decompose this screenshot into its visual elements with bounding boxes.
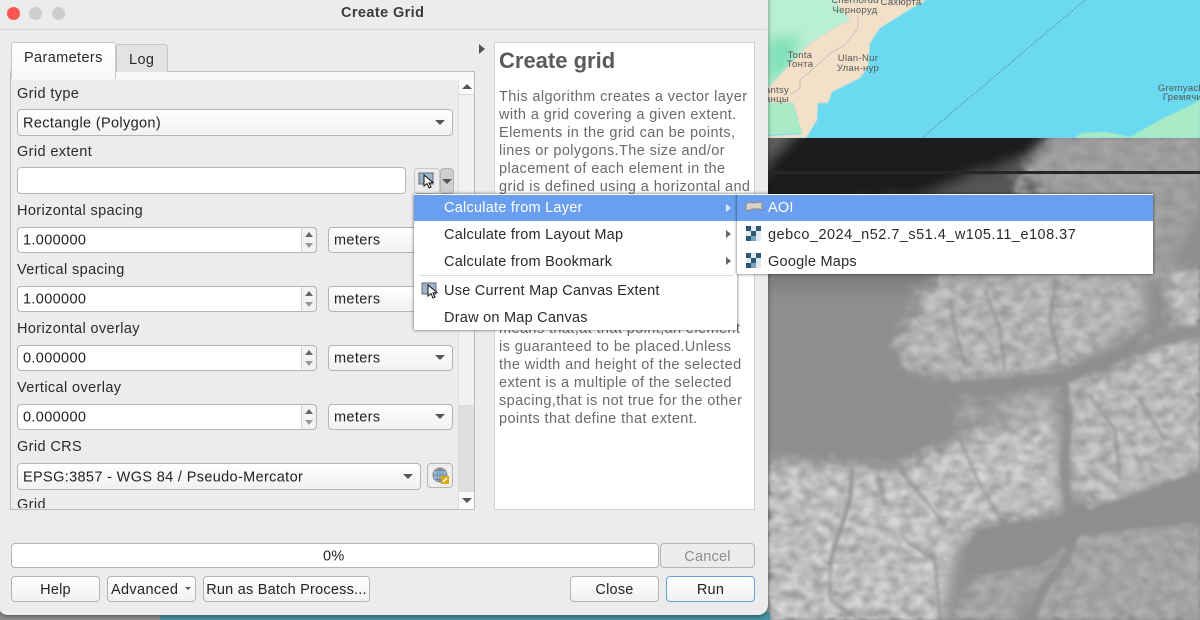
terrain: lower valley band bbox=[965, 470, 1200, 575]
combo: horizontal units bbox=[328, 227, 453, 253]
submenu item highlighted: AOI: AOI bbox=[768, 200, 794, 216]
menu item: Use Current Map Canvas Extent: Use Current Map Canvas Extent bbox=[444, 283, 660, 299]
extent dropdown menu bbox=[414, 194, 737, 330]
terrain: valley network bbox=[830, 280, 1200, 620]
combo: horizontal overlay units bbox=[328, 345, 453, 371]
help text block bbox=[499, 89, 750, 427]
button: Help bbox=[11, 576, 100, 602]
button: Run as Batch Process: Run as Batch Process... bbox=[206, 582, 367, 598]
button: Advanced bbox=[107, 576, 196, 602]
splitter arrow bbox=[479, 44, 485, 54]
window minimize button bbox=[29, 7, 42, 20]
terrain: dark basin at top bbox=[755, 120, 1060, 250]
menu item highlighted: Calculate from Layer bbox=[414, 195, 737, 221]
input: grid extent bbox=[17, 167, 406, 194]
label: Vertical overlay: Vertical overlay bbox=[17, 380, 121, 396]
submenu item: Google Maps: Google Maps bbox=[768, 254, 857, 270]
spin box: horizontal overlay bbox=[17, 345, 317, 371]
map: lake and shoreline: Ulan-Nur bbox=[838, 53, 878, 64]
combo: vertical overlay units: meters bbox=[334, 409, 380, 425]
button: Run as Batch Process bbox=[203, 576, 370, 602]
menu item: Calculate from Layout Map: Calculate from Layout Map bbox=[444, 227, 623, 243]
help text block: placement of each element in the bbox=[499, 161, 725, 177]
tab: Parameters bbox=[11, 42, 116, 79]
help text block: extent is a multiple of the selected bbox=[499, 375, 732, 391]
map: lake and shoreline: Тонта bbox=[787, 59, 814, 70]
window zoom button bbox=[52, 7, 65, 20]
button: CRS selector globe bbox=[427, 463, 453, 488]
terrain: bright ridges bbox=[755, 130, 1200, 620]
background strip below dialog bbox=[160, 612, 770, 620]
scrollbar thumb bbox=[459, 80, 474, 405]
help text block: points that define that extent. bbox=[499, 411, 698, 427]
spin box: vertical spacing bbox=[17, 286, 317, 312]
help text block: means that,at that point,an element bbox=[499, 321, 740, 337]
button: Cancel bbox=[660, 543, 755, 568]
combo: vertical overlay units bbox=[328, 404, 453, 430]
window close button bbox=[7, 7, 20, 20]
panel: help text bbox=[494, 42, 755, 510]
spin box: horizontal overlay: 0.000000 bbox=[23, 350, 86, 366]
tab: Parameters: Parameters bbox=[24, 50, 103, 66]
panel: parameters bbox=[10, 71, 475, 510]
map: lake and shoreline: Улан-нур bbox=[837, 63, 879, 74]
label: Vertical spacing: Vertical spacing bbox=[17, 262, 125, 278]
progress bar bbox=[11, 543, 659, 568]
scrollbar bbox=[458, 80, 474, 509]
spin box: horizontal spacing bbox=[17, 227, 317, 253]
scrollbar down button bbox=[459, 492, 474, 509]
help text block: the width and height of the selected bbox=[499, 357, 742, 373]
help text block: lines or polygons.The size and/or bbox=[499, 143, 725, 159]
label: Grid type: Grid type bbox=[17, 86, 79, 102]
spin box: vertical spacing: 1.000000 bbox=[23, 291, 86, 307]
combo: grid CRS: EPSG:3857 - WGS 84 / Pseudo-Mercator bbox=[23, 469, 303, 485]
submenu item highlighted: AOI bbox=[737, 195, 1153, 221]
label: Grid extent: Grid extent bbox=[17, 144, 92, 160]
help text block: with a grid covering a given extent. bbox=[499, 107, 737, 123]
spin box: vertical overlay bbox=[17, 404, 317, 430]
button: Cancel: Cancel bbox=[684, 549, 731, 565]
combo: vertical units: meters bbox=[334, 291, 380, 307]
button: Run: Run bbox=[697, 582, 724, 598]
button: map canvas extent bbox=[414, 168, 440, 194]
map: lake and shoreline bbox=[768, 0, 1200, 138]
spin box: horizontal spacing: 1.000000 bbox=[23, 232, 86, 248]
help text block: grid is defined using a horizontal and bbox=[499, 179, 750, 195]
spin box: vertical overlay: 0.000000 bbox=[23, 409, 86, 425]
combo: grid type: Rectangle (Polygon) bbox=[23, 115, 161, 131]
button: Close: Close bbox=[595, 582, 634, 598]
label: Horizontal spacing: Horizontal spacing bbox=[17, 203, 143, 219]
dialog window: Create Grid bbox=[0, 0, 768, 615]
button: Close bbox=[570, 576, 659, 602]
tab: Log bbox=[116, 44, 168, 72]
menu item: Draw on Map Canvas: Draw on Map Canvas bbox=[444, 310, 588, 326]
help text block: This algorithm creates a vector layer bbox=[499, 89, 748, 105]
combo: grid CRS bbox=[17, 463, 421, 490]
button: extent dropdown bbox=[440, 168, 454, 194]
submenu item: gebco raster: gebco_2024_n52.7_s51.4_w105.11_e108.37 bbox=[768, 227, 1076, 243]
menu item: Calculate from Bookmark bbox=[444, 254, 731, 270]
help text block: spacing,that is not true for the other bbox=[499, 393, 742, 409]
title bar bbox=[0, 0, 767, 30]
combo: grid type bbox=[17, 109, 453, 136]
menu item highlighted: Calculate from Layer: Calculate from Layer bbox=[444, 200, 583, 216]
progress bar: 0% bbox=[323, 548, 345, 564]
menu item: Calculate from Layout Map bbox=[444, 227, 731, 243]
label: Horizontal overlay: Horizontal overlay bbox=[17, 321, 140, 337]
scrollbar up button bbox=[459, 80, 474, 95]
map: lake and shoreline: Tonta bbox=[788, 50, 813, 61]
button: Help: Help bbox=[40, 582, 71, 598]
label: Grid CRS: Grid CRS bbox=[17, 439, 82, 455]
combo: vertical units bbox=[328, 286, 453, 312]
combo: horizontal units: meters bbox=[334, 232, 380, 248]
window title: Create Grid bbox=[341, 5, 424, 21]
button: Run bbox=[666, 576, 755, 602]
combo: horizontal overlay units: meters bbox=[334, 350, 380, 366]
help text block: Elements in the grid can be points, bbox=[499, 125, 735, 141]
map: lake and shoreline: Черноруд bbox=[833, 5, 878, 16]
help heading: Create grid bbox=[499, 48, 615, 73]
menu item: Calculate from Bookmark: Calculate from Bookmark bbox=[444, 254, 612, 270]
button: Advanced: Advanced bbox=[111, 582, 178, 598]
help text block: is guaranteed to be placed.Unless bbox=[499, 339, 731, 355]
layer submenu bbox=[737, 194, 1153, 274]
terrain: grey elevation raster bbox=[768, 138, 1200, 620]
tab: Log: Log bbox=[129, 52, 154, 68]
